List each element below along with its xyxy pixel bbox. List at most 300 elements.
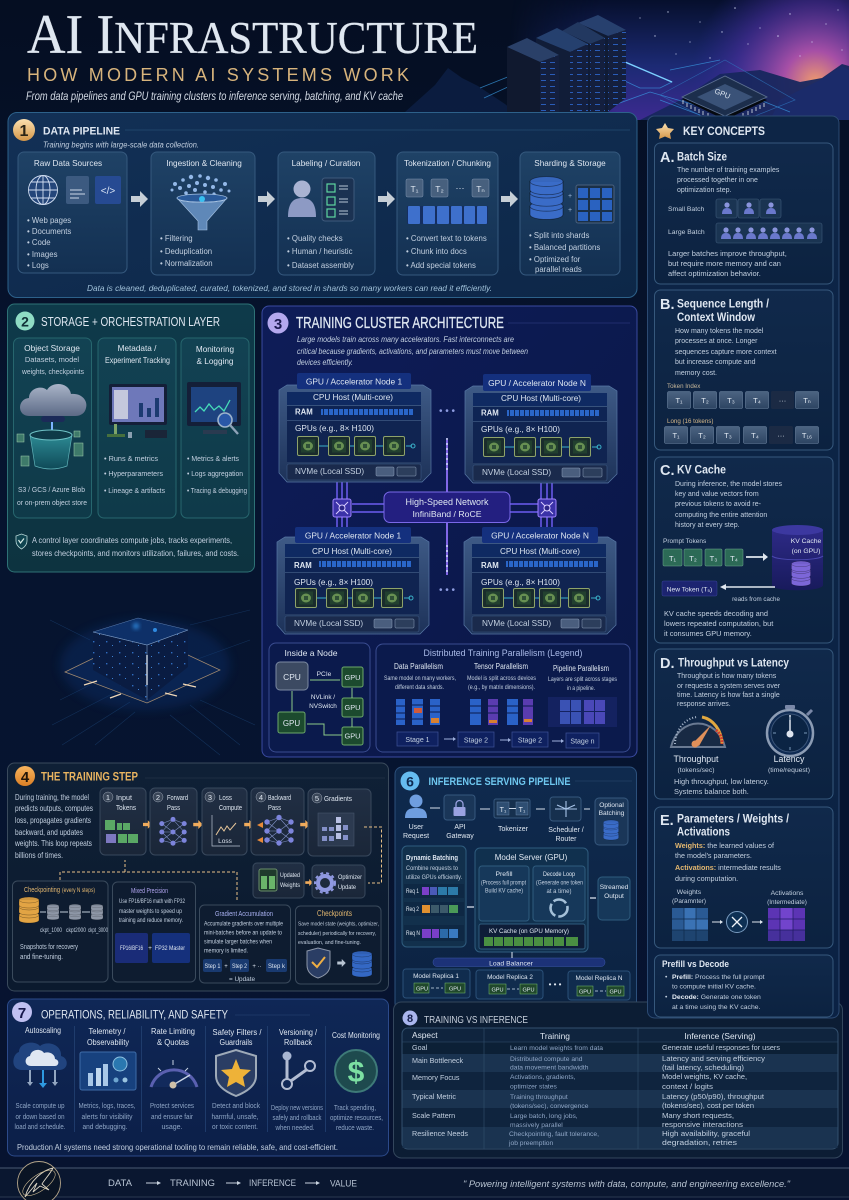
- node: top right: NVMe (Local SSD): [482, 468, 551, 477]
- column: telemetry: and debugging.: [82, 1124, 128, 1131]
- dynamic batching: Req 1: [406, 888, 419, 895]
- network hub: High-Speed Network: [405, 497, 489, 507]
- KV cache strip: KV Cache (on GPU Memory): [489, 928, 569, 935]
- card: metadata tracking: Metadata /: [118, 344, 157, 353]
- card: sharding and storage: Sharding & Storage: [534, 159, 606, 168]
- inset: inside a node: PCIe: [317, 671, 332, 678]
- concept: prefill vs decode: •: [665, 994, 668, 1001]
- callout: gradient accumulation: + ··: [252, 964, 262, 970]
- card: object storage: weights, checkpoints: [21, 367, 84, 376]
- concept C: KV cache: lowers repeated computation, but: [664, 619, 773, 628]
- dots: • • •: [439, 406, 456, 417]
- callout: checkpoints: Save model state (weights, optimizer,: [298, 922, 379, 928]
- legend: parallelism: Data Parallelism: [394, 662, 443, 671]
- node: top right: [465, 374, 617, 483]
- concept: prefill vs decode: Decode: Generate one token: [672, 994, 761, 1001]
- concept D: throughput vs latency: or requests a system serves over: [677, 683, 781, 690]
- icon: document: [66, 176, 89, 204]
- description: weights. This loop repeats: [14, 839, 92, 848]
- card: monitoring and logging: [181, 338, 249, 518]
- panel: key concepts: [648, 116, 839, 1018]
- card: labeling and curation: [278, 152, 375, 275]
- icon: stopwatch: [767, 705, 813, 756]
- callout: gradient accumulation: memory is limited.: [204, 948, 248, 954]
- dashed loop: gradients to optimizer: [364, 827, 382, 883]
- replica 1: GPU: [416, 986, 428, 992]
- concept E: parameters weights activations: during computation.: [675, 874, 738, 883]
- streamed output: Output: [604, 893, 624, 900]
- callout: mixed precision: Mixed Precision: [131, 886, 168, 895]
- arrow: [536, 808, 545, 810]
- concept: prefill vs decode: Prefill vs Decode: [662, 959, 729, 969]
- concept C: KV cache: C.: [660, 463, 674, 479]
- column: safety filters: Guardrails: [220, 1038, 253, 1047]
- concept B: sequence length: ···: [779, 396, 786, 405]
- heading: OPERATIONS, RELIABILITY, AND SAFETY: [41, 1010, 228, 1022]
- badge 3: [268, 312, 288, 334]
- network hub: [384, 492, 510, 522]
- column: rate limiting: Rate Limiting: [151, 1027, 195, 1036]
- node: top left: [279, 373, 431, 482]
- step: input tokens: Tokens: [116, 803, 136, 812]
- column: versioning: Versioning /: [279, 1028, 318, 1037]
- card: object storage: S3 / GCS / Azure Blob: [18, 485, 85, 494]
- row: scale pattern: responsive interactions: [662, 1120, 743, 1129]
- node: top left: GPUs (e.g., 8× H100): [295, 424, 374, 433]
- row: typical metric: Latency (p50/p90), throughput: [662, 1092, 764, 1101]
- concept: prefill vs decode: •: [665, 974, 668, 981]
- background: [406, 0, 849, 120]
- row: goal: [412, 1043, 780, 1052]
- step: backward pass: 4: [259, 793, 263, 802]
- card: ingestion and cleaning: • Normalization: [160, 259, 213, 268]
- inset: inside a node: [269, 643, 370, 752]
- dynamic batching: Combine requests to: [406, 866, 459, 872]
- card: object storage: or on-prem object store: [17, 498, 87, 507]
- card: sharding and storage: [520, 152, 620, 275]
- legend: parallelism: Pipeline Parallelism: [553, 664, 609, 673]
- row: scale pattern: Large batch, long jobs,: [510, 1113, 578, 1120]
- node: bottom left: GPUs (e.g., 8× H100): [294, 578, 373, 587]
- column: versioning: Deploy new versions: [271, 1105, 323, 1112]
- quote: " Powering intelligent systems with data, compute, and engineering excellence.": [463, 1178, 791, 1189]
- column: rate limiting: & Quotas: [157, 1038, 189, 1047]
- heading: DATA PIPELINE: [43, 126, 120, 138]
- concept C: KV cache: Prompt Tokens: [663, 538, 707, 545]
- description: Large models train across many accelerators. Fast interconnects are: [297, 335, 514, 344]
- replica 2: Model Replica 2: [487, 974, 533, 981]
- footer band: [0, 1162, 849, 1200]
- dots: • • •: [439, 585, 456, 596]
- row: memory focus: Memory Focus: [412, 1073, 460, 1082]
- comparison table: Training: [540, 1031, 570, 1041]
- concept A: batch size: optimization step.: [677, 187, 732, 194]
- scheduler router: Router: [555, 836, 577, 843]
- row: main bottleneck: Latency and serving efficiency: [662, 1054, 765, 1063]
- heading: INFERENCE SERVING PIPELINE: [428, 776, 570, 788]
- load balancer: [433, 952, 605, 968]
- column: cost monitoring: $: [348, 1056, 365, 1089]
- step: loss compute: Loss: [219, 793, 232, 802]
- API gateway: [444, 795, 475, 840]
- concept D: throughput vs latency: Systems balance both.: [674, 787, 749, 796]
- concept C: KV cache: [654, 457, 833, 643]
- node: bottom right: [464, 527, 616, 634]
- step: optimizer update: Optimizer: [338, 874, 363, 881]
- legend: parallelism: Same model on many workers,: [384, 675, 456, 682]
- arrow: [300, 820, 310, 829]
- row: main bottleneck: data movement bandwidth: [510, 1064, 589, 1072]
- step: loss compute: [202, 788, 247, 855]
- node: top left: RAM: [295, 408, 313, 416]
- load balancer: Load Balancer: [489, 960, 534, 968]
- card: metadata tracking: • Lineage & artifacts: [104, 486, 165, 495]
- card: labeling and curation: • Quality checks: [287, 234, 343, 243]
- concept C: KV cache: KV Cache: [677, 464, 726, 476]
- icon: person: [288, 180, 316, 217]
- icon: tokens: ···: [456, 183, 464, 193]
- badge 4: [15, 766, 35, 786]
- step: gradients: 5: [315, 794, 319, 803]
- concept D: throughput vs latency: (tokens/sec): [677, 767, 715, 774]
- concept D: throughput vs latency: (time/request): [768, 767, 810, 774]
- node: bottom left: NVMe (Local SSD): [294, 619, 363, 628]
- callout: checkpointing: Checkpointing: [24, 885, 60, 894]
- concept E: parameters weights activations: (Intermediate): [767, 899, 807, 906]
- concept B: sequence length: B.: [660, 297, 674, 313]
- summary: Data is cleaned, deduplicated, curated, tokenized, and stored in shards so many workers can read it efficiently.: [87, 283, 492, 293]
- node: bottom right: CPU Host (Multi-core): [500, 547, 580, 556]
- stages: Stage 2: [518, 738, 542, 744]
- callout: checkpointing: Snapshots for recovery: [20, 942, 78, 951]
- panel: 1 data pipeline: [8, 112, 637, 298]
- arrow: [467, 906, 474, 908]
- card: metadata tracking: • Runs & metrics: [104, 454, 158, 463]
- replica N: Model Replica N: [576, 975, 623, 982]
- concept D: throughput vs latency: response arrives.: [677, 701, 731, 708]
- tagline: From data pipelines and GPU training clusters to inference serving, batching, and KV cache: [26, 89, 403, 103]
- arrow: [480, 808, 490, 810]
- row: typical metric: (tokens/sec), convergence: [510, 1103, 589, 1110]
- inset: inside a node: CPU: [283, 672, 301, 682]
- row: typical metric: Typical Metric: [412, 1092, 456, 1101]
- concept C: KV cache: During inference, the model stores: [675, 481, 782, 488]
- icon: KV cache cylinder: (on GPU): [792, 548, 820, 555]
- concept A: batch size: affect optimization behavior.: [668, 269, 761, 278]
- icon: shard grid: [568, 185, 614, 223]
- row: resilience needs: job preemption: [508, 1140, 554, 1147]
- card: monitoring and logging: • Metrics & alerts: [187, 454, 239, 463]
- replica 2: [476, 970, 543, 999]
- arrow: [193, 820, 203, 829]
- concept D: throughput vs latency: Throughput is how many tokens: [677, 673, 777, 680]
- stages: Stage n: [570, 738, 595, 746]
- callout: gradient accumulation: +: [224, 964, 228, 970]
- legend: parallelism: Tensor Parallelism: [474, 662, 528, 671]
- row: resilience needs: degradation, retries: [662, 1138, 737, 1147]
- stages: Stage 1: [405, 737, 430, 744]
- step: input tokens: [100, 788, 146, 855]
- callout: checkpointing: ckpt_1000: [40, 928, 63, 934]
- node: top left: CPU Host (Multi-core): [313, 393, 393, 402]
- activations grid: [768, 908, 805, 941]
- badge 7: [12, 1002, 32, 1022]
- step: loss compute: Loss: [218, 838, 233, 845]
- badge 3: 3: [274, 316, 282, 333]
- column: rate limiting: [150, 1027, 197, 1131]
- node: top right: GPU / Accelerator Node N: [488, 378, 586, 388]
- column: rate limiting: Protect services: [150, 1103, 194, 1110]
- replica 1: [403, 969, 470, 998]
- node: top right: GPUs (e.g., 8× H100): [481, 425, 560, 434]
- concept C: KV cache: T₁: [669, 554, 677, 563]
- row: resilience needs: Resilience Needs: [412, 1129, 468, 1138]
- icon: GPU chip: GPU: [713, 87, 732, 101]
- concept E: parameters weights activations: E.: [660, 813, 674, 829]
- legend: parallelism: [376, 644, 630, 752]
- heading: TRAINING CLUSTER ARCHITECTURE: [296, 315, 504, 332]
- callout: checkpoints: Checkpoints: [317, 909, 352, 918]
- row: main bottleneck: Main Bottleneck: [412, 1056, 464, 1065]
- concept E: parameters weights activations: (Paramnter): [672, 898, 706, 905]
- concept C: KV cache: history at every step.: [675, 522, 740, 529]
- card: ingestion and cleaning: [151, 152, 255, 275]
- card: monitoring and logging: • Logs aggregation: [187, 469, 243, 478]
- callout: mixed precision: FP16/BF16: [120, 945, 143, 952]
- card: labeling and curation: • Dataset assembly: [287, 261, 354, 270]
- concept D: throughput vs latency: Latency: [774, 754, 805, 764]
- description: critical because gradients, activations, and parameters must move between: [297, 347, 528, 356]
- step: backward pass: [251, 788, 304, 855]
- inset: inside a node: Inside a Node: [284, 648, 338, 658]
- description: loss, propagates gradients: [15, 816, 91, 825]
- badge 4: 4: [21, 769, 30, 786]
- concept C: KV cache: key and value vectors from: [675, 491, 759, 498]
- replica N: GPU: [609, 990, 622, 996]
- row: scale pattern: [412, 1111, 743, 1129]
- node: top right: CPU Host (Multi-core): [501, 394, 581, 403]
- concept E: parameters weights activations: Activations: [677, 826, 730, 838]
- concept A: batch size: Large Batch: [668, 229, 705, 236]
- row: typical metric: [412, 1092, 764, 1110]
- panel: 3 training cluster architecture: [262, 306, 637, 757]
- step: input tokens: Input: [116, 793, 132, 802]
- card: tokenization and chunking: [397, 152, 498, 275]
- card: object storage: [14, 338, 92, 518]
- node: bottom right: NVMe (Local SSD): [482, 619, 551, 628]
- replica 2: GPU: [491, 988, 504, 994]
- column: safety filters: [212, 1028, 262, 1131]
- callout: checkpointing: [12, 881, 108, 982]
- tokenizer: T₁: [519, 807, 526, 814]
- concept E: parameters weights activations: Activations: [771, 890, 804, 897]
- card: raw data sources: [18, 152, 127, 273]
- panel: 7 operations, reliability and safety: [8, 999, 388, 1156]
- step: forward pass: [150, 788, 197, 855]
- optional batching: [595, 798, 628, 845]
- network interconnects: [333, 438, 556, 575]
- dynamic batching: utilize GPUs efficiently.: [406, 875, 462, 881]
- node: top left: GPU / Accelerator Node 1: [306, 376, 403, 386]
- dots: • • •: [549, 980, 562, 989]
- optional batching: Optional: [599, 802, 624, 809]
- card: tokenization and chunking: Tokenization / Chunking: [404, 159, 491, 168]
- concept B: sequence length: Tₙ: [803, 396, 811, 405]
- weights grid: [672, 908, 708, 941]
- card: tokenization and chunking: • Chunk into docs: [406, 247, 467, 256]
- column: safety filters: Detect and block: [212, 1103, 260, 1110]
- icon: shard grid: +: [568, 193, 572, 200]
- node: top right: RAM: [481, 408, 499, 418]
- node: bottom right: GPU / Accelerator Node N: [491, 530, 589, 540]
- callout: checkpointing: ckpt2000: [66, 928, 87, 934]
- summary: Production AI systems need strong operational tooling to remain reliable, safe, and cost-efficient.: [17, 1142, 338, 1152]
- column: versioning: when needed.: [275, 1125, 315, 1132]
- callout: checkpoints: evaluation, and fine-tuning.: [298, 940, 361, 946]
- replica N: [568, 971, 630, 1000]
- model server: Decode Loop: [543, 871, 575, 878]
- node: bottom right: GPUs (e.g., 8× H100): [481, 578, 560, 587]
- tokenizer: Tokenizer: [498, 826, 529, 833]
- replica 2: GPU: [522, 988, 535, 994]
- description: [14, 793, 93, 860]
- callout: mixed precision: training and reduce memory.: [119, 917, 183, 924]
- concept A: batch size: processed together in one: [677, 177, 758, 184]
- row: goal: Goal: [412, 1043, 428, 1052]
- concept B: sequence length: but increase compute and: [675, 359, 756, 366]
- callout: gradient accumulation: Step 1: [204, 964, 221, 970]
- legend: parallelism: in a pipeline.: [567, 685, 595, 692]
- flow: data to value: DATA: [108, 1178, 133, 1188]
- icon: gauge: [671, 717, 725, 748]
- step: updated weights: Updated: [280, 872, 300, 879]
- panel: 2 storage and orchestration: [8, 304, 254, 572]
- callout: checkpointing: (every N steps): [62, 887, 95, 894]
- concept B: sequence length: ···: [777, 431, 785, 440]
- card: raw data sources: • Documents: [27, 227, 71, 236]
- concept E: parameters weights activations: Activations: intermediate results: [675, 863, 781, 872]
- model server: (Generate one token: [536, 880, 583, 886]
- concept B: sequence length: Long (16 tokens): [667, 418, 713, 425]
- node: bottom left: CPU Host (Multi-core): [312, 547, 392, 556]
- inset: inside a node: GPU: [344, 732, 361, 740]
- badge 1: 1: [20, 123, 29, 140]
- card: metadata tracking: • Hyperparameters: [104, 469, 163, 478]
- concept B: sequence length: T₃: [724, 431, 732, 440]
- model server: Build KV cache): [485, 888, 523, 894]
- dynamic batching: Req 2: [406, 906, 419, 913]
- column: safety filters: or toxic content.: [212, 1124, 258, 1131]
- concept C: KV cache: T₃: [710, 554, 717, 563]
- concept B: sequence length: [654, 290, 833, 450]
- row: typical metric: (tokens/sec), cost per token: [662, 1101, 754, 1110]
- icon: database: [530, 177, 563, 219]
- arrow: [584, 808, 590, 810]
- icon: shield check: [16, 534, 27, 549]
- description: backward, and updates: [15, 828, 83, 837]
- callout: mixed precision: FP32 Master: [155, 945, 186, 952]
- badge 2: 2: [21, 314, 29, 330]
- callout: gradient accumulation: Step 2: [232, 964, 248, 970]
- badge 6: 6: [406, 774, 414, 790]
- card: object storage: Datasets, model: [25, 355, 79, 364]
- card: raw data sources: Raw Data Sources: [34, 159, 102, 168]
- streamed output: [598, 877, 630, 920]
- heading: TRAINING VS INFERENCE: [424, 1014, 528, 1026]
- legend: parallelism: Distributed Training Parallelism (Legend): [424, 648, 583, 658]
- concept B: sequence length: T₂: [698, 431, 706, 440]
- comparison table: [402, 1028, 838, 1149]
- node: top left: NVMe (Local SSD): [295, 467, 364, 476]
- description: [297, 335, 528, 367]
- title: AI INFRASTRUCTURE: [27, 4, 478, 66]
- callout: gradient accumulation: Gradient Accumulation: [215, 909, 273, 918]
- column: autoscaling: load and schedule.: [14, 1124, 66, 1131]
- row: resilience needs: [412, 1129, 750, 1147]
- tokenizer: T₁: [500, 807, 507, 814]
- card: sharding and storage: parallel reads: [535, 265, 582, 274]
- column: autoscaling: [13, 1026, 67, 1131]
- concept B: sequence length: processes at once. Longer: [675, 338, 758, 345]
- badge 1: [13, 119, 35, 141]
- flow: data to value: VALUE: [330, 1178, 357, 1188]
- legend: parallelism: different data shards.: [395, 684, 444, 691]
- node: bottom right: RAM: [481, 561, 499, 570]
- model server: (Process full prompt: [481, 880, 526, 886]
- concept B: sequence length: T₁₆: [802, 431, 812, 440]
- control layer note: A control layer coordinates compute jobs, tracks experiments,: [32, 535, 232, 545]
- node: bottom left: GPU / Accelerator Node 1: [305, 530, 402, 540]
- concept C: KV cache: KV cache speeds decoding and: [664, 609, 768, 618]
- concept C: KV cache: reads from cache: [732, 596, 780, 603]
- concept: prefill vs decode: Prefill: Process the full prompt: [672, 974, 765, 981]
- icon: funnel: [170, 174, 230, 230]
- card: monitoring and logging: • Tracing & debugging: [187, 486, 247, 495]
- illustration: data cube: [50, 610, 255, 755]
- step: updated weights: [253, 863, 304, 898]
- column: cost monitoring: Track spending,: [334, 1105, 376, 1112]
- column: telemetry: Metrics, logs, traces,: [78, 1103, 136, 1110]
- optional batching: Batching: [599, 810, 625, 817]
- flow: data to value: [108, 1178, 357, 1188]
- concept A: batch size: The number of training examples: [677, 167, 780, 174]
- concept E: parameters weights activations: Parameters / Weights /: [677, 814, 790, 826]
- step: loss compute: Compute: [219, 803, 242, 812]
- icon: shard grid: +: [568, 207, 572, 214]
- row: memory focus: Activations, gradients,: [510, 1074, 576, 1081]
- intro: Training begins with large-scale data collection.: [43, 140, 199, 150]
- callout: gradient accumulation: Step k: [268, 964, 286, 970]
- API gateway: Gateway: [446, 833, 474, 840]
- concept E: parameters weights activations: Weights: [677, 889, 702, 896]
- step: forward pass: 2: [156, 793, 160, 802]
- column: autoscaling: Autoscaling: [25, 1026, 61, 1035]
- concept D: throughput vs latency: High throughput, low latency.: [674, 777, 769, 786]
- column: cost monitoring: Cost Monitoring: [332, 1031, 380, 1040]
- row: resilience needs: Checkpointing, fault tolerance,: [509, 1131, 599, 1138]
- icon: tokens: T₂: [435, 184, 444, 194]
- concept A: batch size: A.: [660, 150, 674, 166]
- user request: [403, 794, 429, 840]
- card: sharding and storage: • Balanced partitions: [529, 243, 600, 252]
- flow: data to value: INFERENCE: [249, 1178, 296, 1188]
- flow: data to value: TRAINING: [170, 1178, 215, 1188]
- step: optimizer update: Update: [338, 884, 356, 891]
- icon: tokens: [406, 179, 489, 224]
- icon: decode loop: [550, 900, 568, 916]
- row: memory focus: context / logits: [662, 1082, 713, 1091]
- column: versioning: Rollback: [284, 1038, 312, 1047]
